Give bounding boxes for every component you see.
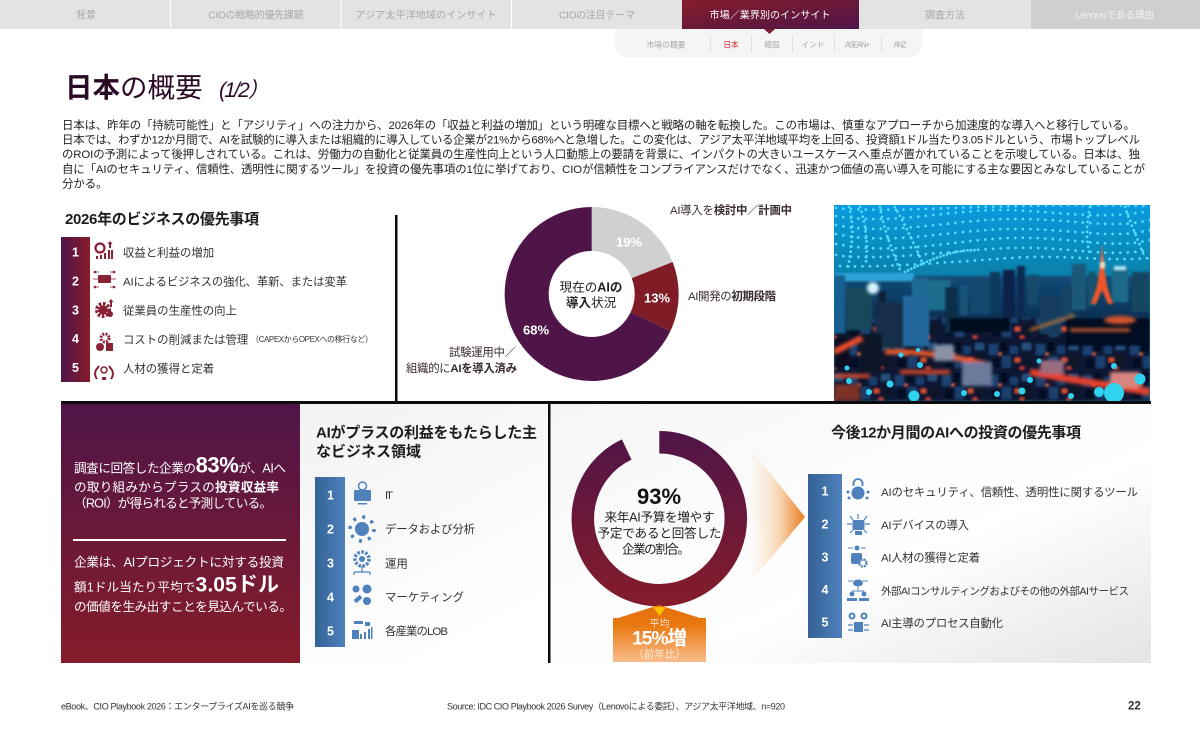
business area text: 運用 xyxy=(385,558,408,570)
number bar: 2 xyxy=(822,518,829,532)
navigation bar: 市場／業界別のインサイト xyxy=(710,8,830,22)
donut chart: current AI adoption: 68% xyxy=(523,322,549,338)
ring chart: 93% xyxy=(583,442,736,595)
ROI text: 83%: の取り組みからプラスの投資収益率 xyxy=(74,480,279,494)
ring centre text xyxy=(598,484,722,556)
city lights xyxy=(834,282,1150,401)
photo: Tokyo skyline with data dots xyxy=(834,205,1150,403)
donut labels: 組織的にAIを導入済み xyxy=(406,361,517,375)
icon: employee productivity xyxy=(97,299,114,317)
number bar: 4 xyxy=(327,590,334,604)
footer: 22 xyxy=(1128,700,1141,712)
donut chart: current AI adoption: 19% xyxy=(616,234,642,250)
panel: AI investment priorities xyxy=(551,404,1151,663)
ring centre text: 予定であると回答した xyxy=(598,526,722,540)
icon: talent acquisition xyxy=(95,366,113,380)
ROI text: 3.05 dollars: 企業は、AIプロジェクトに対する投資 xyxy=(74,554,284,570)
number bar: 2 xyxy=(327,522,334,536)
icon: LOB by industry xyxy=(352,621,372,639)
heading: business areas: AIがプラスの利益をもたらした主 xyxy=(316,424,537,442)
navigation bar: 調査方法 xyxy=(925,8,965,22)
donut centre label: 導入状況 xyxy=(566,295,617,310)
business area text xyxy=(385,490,475,638)
business area text: マーケティング xyxy=(385,590,464,604)
callout: 15% increase: 平均 xyxy=(650,617,670,630)
heading: business areas: なビジネス領域 xyxy=(316,442,421,460)
number bar: 3 xyxy=(72,304,79,318)
number bar xyxy=(808,474,842,638)
heading: investment priorities: 今後12か月間のAIへの投資の優先事項 xyxy=(831,424,1081,442)
number bar: 4 xyxy=(72,332,79,346)
donut labels: AI導入を検討中／計画中 xyxy=(670,203,792,217)
number bar: 4 xyxy=(822,583,829,597)
footer xyxy=(61,700,1141,712)
callout: 15% increase: （前年比） xyxy=(633,648,686,660)
sub navigation xyxy=(615,29,922,57)
navigation bar: Lenovoである理由 xyxy=(1076,8,1154,22)
navigation bar: アジア太平洋地域のインサイト xyxy=(356,8,496,22)
Tokyo Tower xyxy=(1091,244,1113,304)
sub navigation: インド xyxy=(801,40,825,50)
ROI text: 83%: 調査に回答した企業の83%が、AIへ xyxy=(74,452,286,478)
priority list text: （CAPEXからOPEXへの移行など） xyxy=(251,334,373,344)
donut labels: 試験運用中／ xyxy=(449,345,516,359)
number bar: 1 xyxy=(822,484,829,498)
investment priorities text: AIデバイスの導入 xyxy=(881,518,970,532)
donut labels: AI開発の初期段階 xyxy=(688,289,777,303)
donut chart: current AI adoption: 13% xyxy=(644,290,670,306)
callout: 15% increase: 15%増 xyxy=(632,628,687,650)
number bar: 5 xyxy=(822,616,829,630)
panel: ROI callout xyxy=(61,404,300,663)
arrow xyxy=(750,448,805,583)
priority list text: AIによるビジネスの強化、革新、または変革 xyxy=(123,274,347,288)
navigation bar: 背景 xyxy=(76,8,96,22)
icon: data and analytics xyxy=(350,517,374,541)
ROI text: 3.05 dollars: 額1ドル当たり平均で3.05ドル xyxy=(74,574,279,596)
investment priorities text xyxy=(881,485,1138,630)
navigation bar: CIOの注目テーマ xyxy=(559,8,635,22)
icon: AI security xyxy=(846,479,870,500)
icon: revenue growth xyxy=(96,241,113,259)
icon: external AI consulting xyxy=(847,580,869,601)
title: 日本の概要 xyxy=(65,72,202,103)
donut chart: current AI adoption xyxy=(406,203,792,381)
priority list text: 人材の獲得と定着 xyxy=(123,362,214,376)
ring centre text: 企業の割合。 xyxy=(622,542,690,556)
sub navigation: 日本 xyxy=(723,40,739,50)
heading: business areas xyxy=(316,424,537,460)
footer: eBook、CIO Playbook 2026：エンタープライズAIを巡る競争 xyxy=(61,700,294,712)
intro text block: 日本では、わずか12か月間で、AIを試験的に導入または組織的に導入している企業が21%から68%へと急増した。この変化は、アジア太平洋地域平均を上回る、投資額1ドル当たり3.05ドルという、市場トップレベル xyxy=(62,132,1140,146)
foreground light dots xyxy=(844,348,1146,403)
intro text block: のROIの予測によって後押しされている。これは、労働力の自動化と従業員の生産性向上という人口動態上の要請を背景に、インパクトの大きいユースケースへ重点が置かれていることを示唆している。日本は、独 xyxy=(62,147,1140,161)
callout: 15% increase xyxy=(613,605,706,662)
ring centre text: 来年AI予算を増やす xyxy=(604,510,714,524)
investment priorities text: AI人材の獲得と定着 xyxy=(881,550,980,564)
business area text: データおよび分析 xyxy=(385,522,475,536)
ROI text: 83% xyxy=(74,452,286,510)
icon: AI talent xyxy=(848,546,866,566)
priority list text: コストの削減または管理 xyxy=(123,332,249,346)
skyline xyxy=(834,264,1150,401)
icon: IT xyxy=(354,482,371,504)
intro text block: 自に「AIのセキュリティ、信頼性、透明性に関するツール」を投資の優先事項の1位に挙げており、CIOが信頼性をコンプライアンスだけでなく、迅速かつ価値の高い導入を可能にする主な要因とみなしていることが xyxy=(62,162,1146,176)
number bar: 2 xyxy=(72,274,79,288)
intro text block: 分かる。 xyxy=(62,178,108,190)
ring centre text: 93% xyxy=(637,484,681,509)
ROI text: 3.05 dollars: の価値を生み出すことを見込んでいる。 xyxy=(74,599,292,614)
icon: AI devices xyxy=(847,514,870,535)
ROI text: 83%: （ROI）が得られると予測している。 xyxy=(74,496,272,510)
divider lines xyxy=(61,215,1151,404)
intro text block: 日本は、昨年の「持続可能性」と「アジリティ」への注力から、2026年の「収益と利益の増加」という明確な目標へと戦略の軸を転換した。この市場は、慎重なアプローチから加速度的な導入へと移行している。 xyxy=(62,118,1135,132)
panel: business areas with positive AI returns xyxy=(300,404,549,663)
sub navigation: ASEAN+ xyxy=(845,40,870,50)
investment priorities text: AIのセキュリティ、信頼性、透明性に関するツール xyxy=(881,485,1138,499)
icon: AI process automation xyxy=(848,614,869,632)
number bar: 5 xyxy=(72,361,79,375)
donut centre label: 現在のAIの xyxy=(560,280,622,294)
icon: marketing xyxy=(352,584,372,605)
vertical divider xyxy=(548,403,550,663)
business area text: 各産業のLOB xyxy=(385,624,448,638)
number bar: 1 xyxy=(327,488,334,502)
priority list text: 収益と利益の増加 xyxy=(123,246,214,260)
number bar: 3 xyxy=(327,556,334,570)
footer: Source: IDC CIO Playbook 2026 Survey（Lenovoによる委託）、アジア太平洋地域、n=920 xyxy=(447,700,785,712)
number bar: 1 xyxy=(72,246,79,260)
navigation bar xyxy=(0,0,1200,29)
number bar: 5 xyxy=(327,624,334,638)
investment priorities text: 外部AIコンサルティングおよびその他の外部AIサービス xyxy=(881,584,1129,598)
icon: cost reduction xyxy=(96,334,113,351)
icon: operations xyxy=(354,552,370,575)
intro text block xyxy=(62,118,1146,190)
title: (1/2） xyxy=(219,79,269,102)
navigation bar: CIOの戦略的優先課題 xyxy=(208,8,304,22)
business area text: IT xyxy=(385,490,393,502)
number bar: 3 xyxy=(822,550,829,564)
panel: business priorities 2026 xyxy=(61,210,373,382)
icon: AI business transformation xyxy=(93,271,116,288)
donut labels xyxy=(406,203,792,375)
title xyxy=(65,72,269,103)
sub navigation: 市場の概要 xyxy=(647,40,686,50)
priority list text: 従業員の生産性の向上 xyxy=(123,304,237,318)
investment priorities text: AI主導のプロセス自動化 xyxy=(881,616,1004,630)
number bar xyxy=(315,477,345,647)
number bar xyxy=(61,237,90,382)
priority list text xyxy=(123,246,373,376)
donut centre label xyxy=(560,280,622,310)
heading: business priorities: 2026年のビジネスの優先事項 xyxy=(65,210,259,228)
sub navigation: ANZ xyxy=(894,40,907,50)
sub navigation: 韓国 xyxy=(764,40,780,50)
sky dots xyxy=(836,205,1150,272)
ROI text: 3.05 dollars xyxy=(74,554,292,614)
